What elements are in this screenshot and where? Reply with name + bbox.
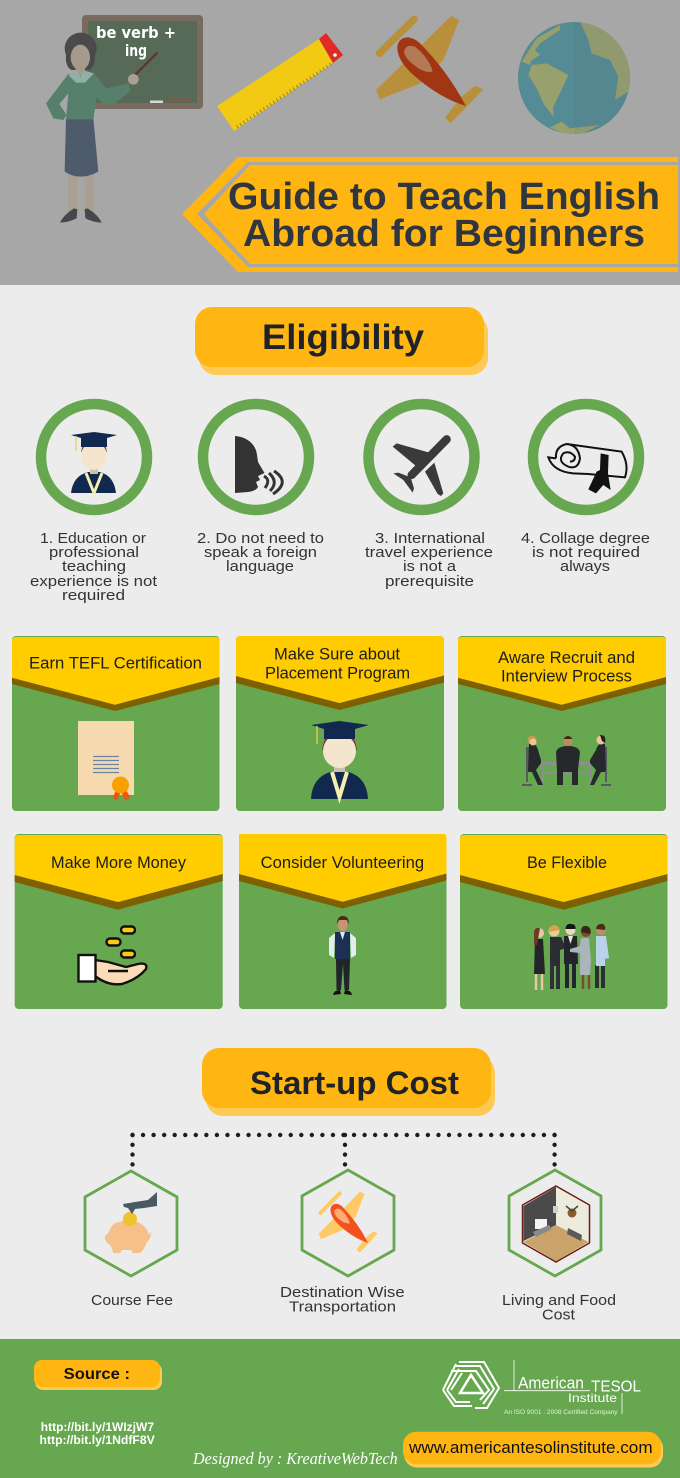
icon: orange airplane (319, 1192, 378, 1253)
text: item 1: 1. Education or (40, 530, 146, 547)
logo: American TESOL Institute (443, 1360, 641, 1416)
title: Abroad for Beginners (243, 213, 645, 255)
icon: globe (518, 22, 633, 135)
source links: http://bit.ly/1NdfF8V (40, 1433, 155, 1447)
panel: course fee (85, 1171, 177, 1309)
text: Destination Wise Transportation (280, 1284, 405, 1316)
icon: standing man (329, 916, 356, 995)
panel: living and food (502, 1170, 616, 1324)
source links (40, 1420, 155, 1447)
logo: American TESOL Institute: American (518, 1374, 584, 1393)
text: item 1: required (62, 587, 125, 604)
card: Be Flexible: Be Flexible (527, 853, 607, 872)
card: Aware Recruit and Interview Process (458, 636, 666, 811)
icon: chalkboard: ing (125, 41, 147, 60)
heading: Start-up Cost (202, 1048, 495, 1116)
icon: graduate (71, 432, 117, 493)
dotted connector (132, 1135, 555, 1165)
text: item 2: speak a foreign (204, 544, 317, 561)
icon: diploma scroll (548, 444, 627, 493)
icon: team of five (534, 924, 609, 990)
icon: graduate (311, 721, 369, 799)
panel: eligibility item 2 (197, 404, 324, 575)
card: Earn TEFL Certification: Earn TEFL Certification (29, 654, 202, 673)
panel: footer (0, 1339, 680, 1478)
text: item 2: 2. Do not need to (197, 530, 324, 547)
text: item 3: travel experience (365, 544, 493, 561)
source pill (34, 1360, 162, 1390)
logo: American TESOL Institute: An ISO 9001 : 2008 Certified Company (504, 1410, 618, 1416)
text: item 4: always (560, 558, 610, 575)
card: Make Sure about Placement Program (236, 636, 444, 811)
text: item 4: 4. Collage degree (521, 530, 650, 547)
logo: American TESOL Institute: Institute (568, 1391, 617, 1405)
icon: certificate (78, 721, 134, 801)
icon: piggy bank (105, 1192, 157, 1253)
panel: eligibility item 1 (30, 404, 158, 604)
card: Make More Money: Make More Money (51, 853, 186, 872)
designer credit: Designed by : KreativeWebTech (192, 1449, 398, 1468)
banner: title arrow (182, 157, 678, 272)
text: item 1: professional (49, 544, 139, 561)
logo: American TESOL Institute: TESOL (591, 1379, 641, 1396)
card: Consider Volunteering: Consider Volunteering (261, 853, 424, 872)
icon: chalkboard: be verb + (96, 23, 176, 42)
card: Aware Recruit and Interview Process: Interview Process (501, 667, 632, 686)
text: Destination Wise Transportation: Destination Wise (280, 1284, 405, 1301)
card: Aware Recruit and Interview Process: Aware Recruit and (498, 648, 635, 667)
icon: interview meeting (522, 735, 611, 786)
source pill: Source : (64, 1366, 130, 1383)
panel: header (0, 0, 680, 285)
text: item 1 (30, 530, 158, 604)
card: Be Flexible (460, 834, 668, 1009)
text: item 3 (365, 530, 493, 590)
card: Consider Volunteering (239, 834, 446, 1009)
icon: hand with coins (78, 926, 146, 984)
text: item 1: experience is not (30, 573, 158, 590)
heading: Start-up Cost: Start-up Cost (250, 1065, 459, 1101)
panel: eligibility item 3 (365, 404, 493, 590)
heading: Eligibility: Eligibility (262, 318, 425, 357)
card: Make Sure about Placement Program: Make Sure about (274, 645, 400, 664)
card: Earn TEFL Certification (12, 636, 220, 811)
title: Guide to Teach English (228, 176, 660, 218)
text: item 2: language (226, 558, 294, 575)
icon: speaking head (235, 436, 282, 494)
title (228, 176, 660, 255)
website pill: www.americantesolinstitute.com (408, 1438, 653, 1457)
text: item 3: is not a (403, 558, 457, 575)
icon: airplane silhouette (393, 439, 447, 496)
icon: chalkboard (82, 15, 203, 109)
text: item 4: is not required (532, 544, 640, 561)
icon: airplane (376, 16, 483, 123)
text: Living and Food Cost: Cost (542, 1306, 576, 1324)
heading: Eligibility (195, 307, 488, 375)
text: Destination Wise Transportation: Transportation (289, 1299, 396, 1316)
text: Course Fee: Course Fee (91, 1292, 173, 1309)
panel: eligibility item 4 (521, 404, 650, 575)
icon: isometric room (522, 1186, 590, 1262)
card: Make More Money (15, 834, 223, 1009)
icon: ruler (217, 33, 343, 131)
text: item 2 (197, 530, 324, 575)
text: item 4 (521, 530, 650, 575)
text: Living and Food Cost (502, 1292, 616, 1324)
text: item 1: teaching (62, 558, 126, 575)
text: item 3: 3. International (375, 530, 485, 547)
website pill (403, 1432, 663, 1468)
text: Living and Food Cost: Living and Food (502, 1292, 616, 1309)
icon: teacher (46, 33, 157, 223)
source links: http://bit.ly/1WIzjW7 (41, 1420, 154, 1434)
card: Make Sure about Placement Program: Placement Program (265, 664, 410, 683)
panel: destination transportation (280, 1170, 405, 1316)
text: item 3: prerequisite (385, 573, 474, 590)
